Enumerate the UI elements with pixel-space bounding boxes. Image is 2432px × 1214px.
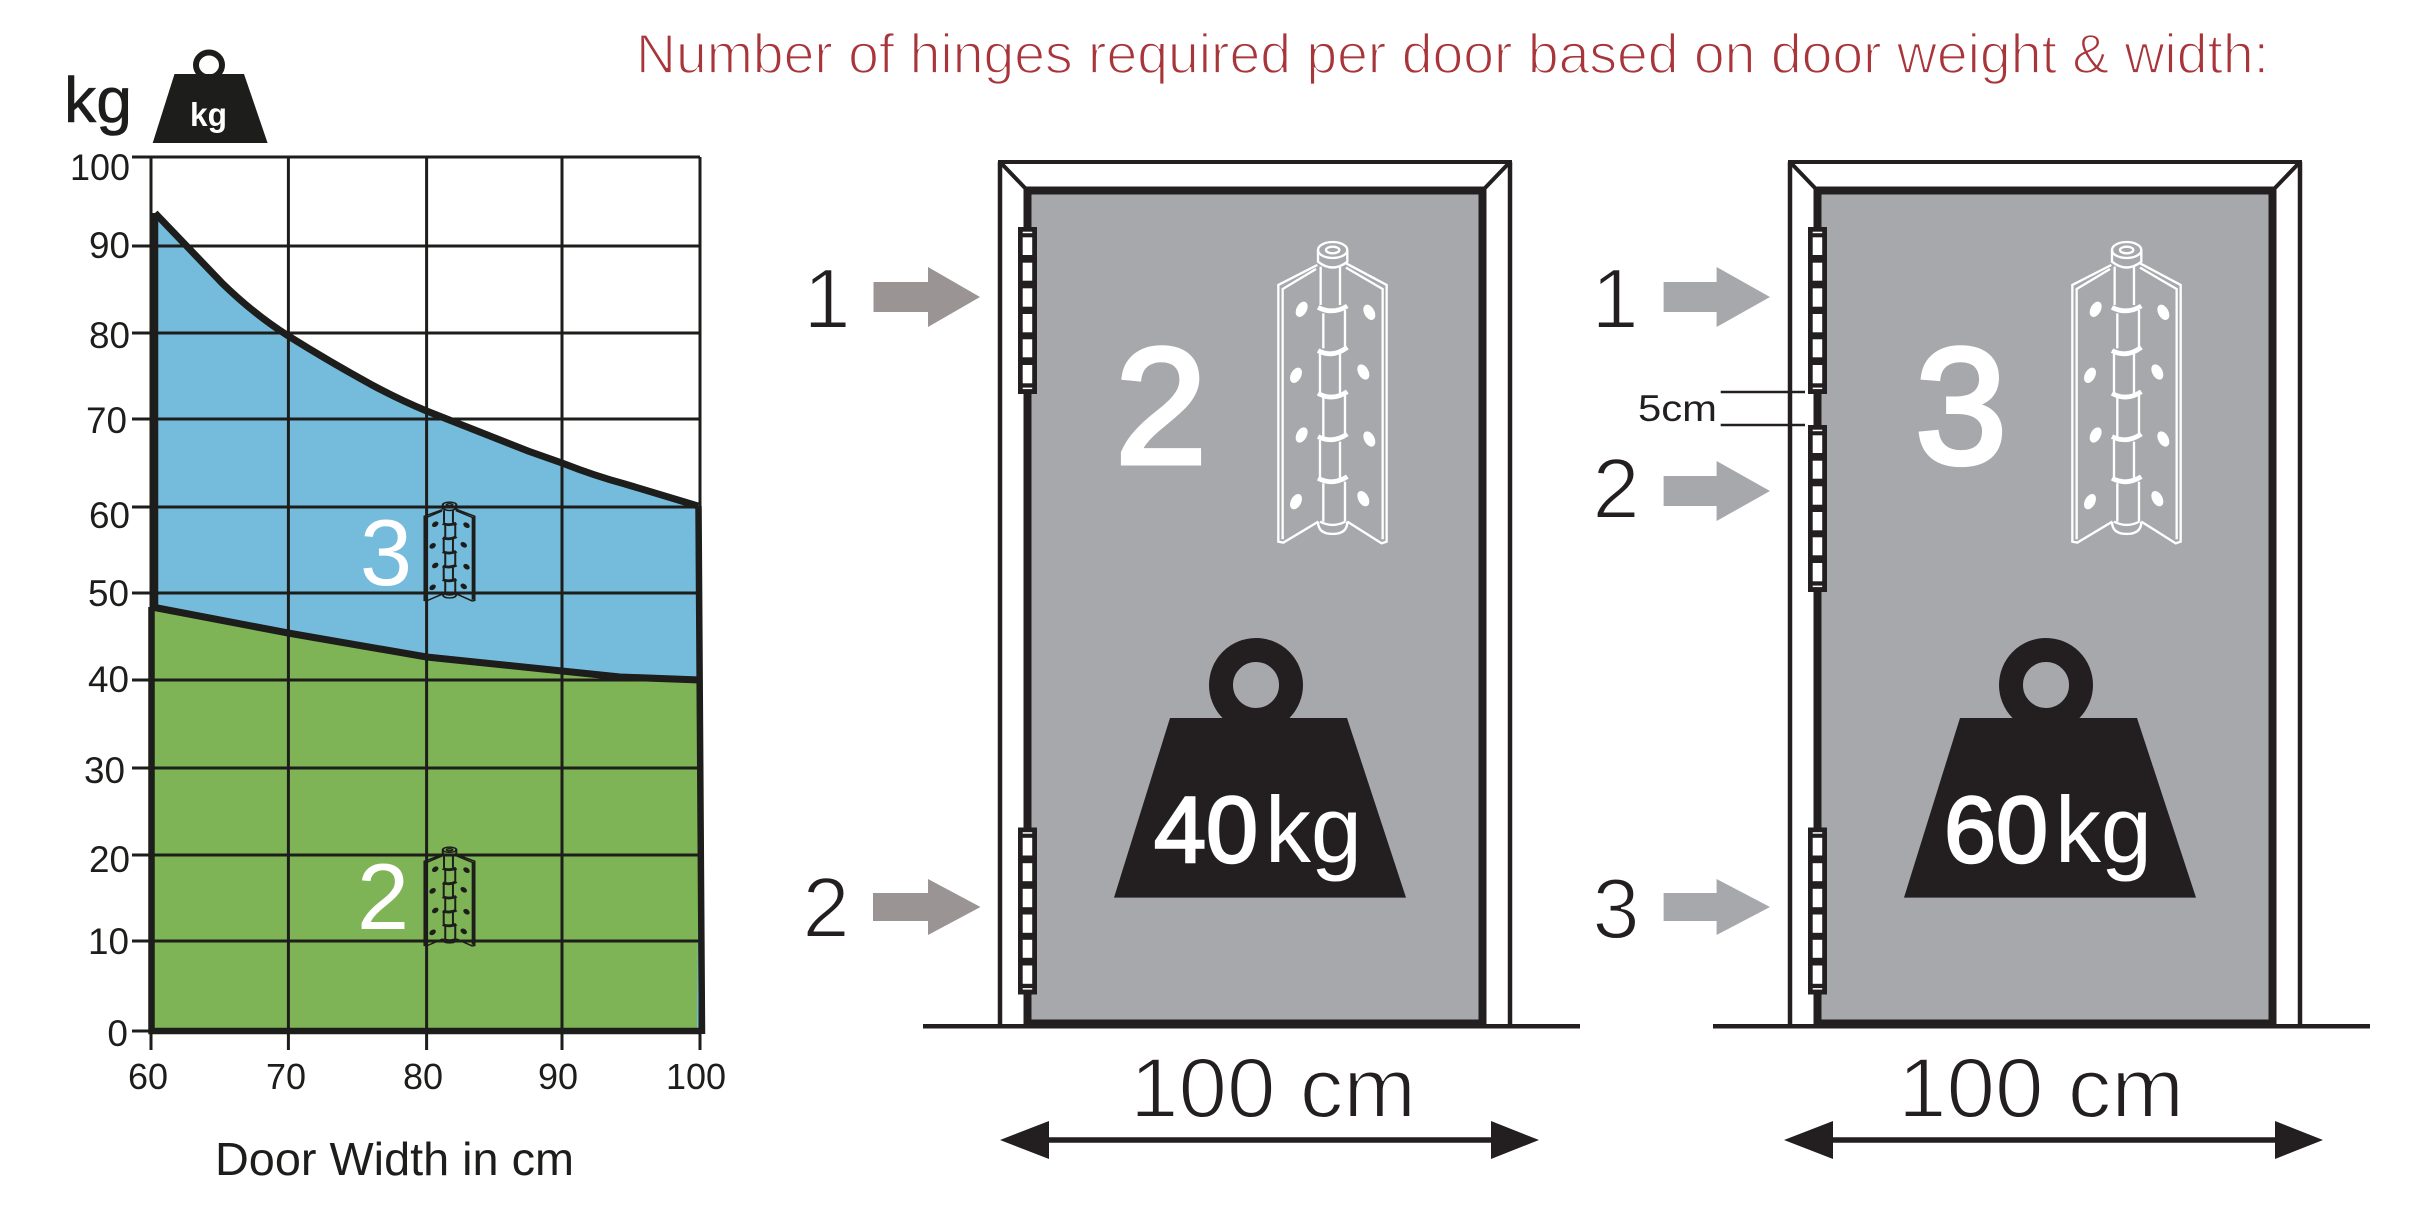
- hinge position 1 marker: [1591, 252, 1770, 347]
- x axis labels: 80: [403, 1056, 443, 1097]
- panel: 40kg door: [802, 162, 1580, 1159]
- icon: 60kg weight: 60: [1944, 777, 2048, 882]
- hinge position 2 marker: [802, 861, 980, 956]
- icon: hinge: [1278, 242, 1387, 543]
- icon: 60kg weight: [1904, 650, 2196, 898]
- y axis labels: 50: [88, 573, 129, 614]
- y axis labels: 20: [89, 839, 130, 880]
- y axis labels: 0: [107, 1013, 128, 1054]
- hinge position 3 marker: [1592, 862, 1770, 957]
- side hinges: [1808, 227, 1827, 994]
- y axis labels: 100: [70, 147, 130, 188]
- hinge position 2 marker: [1592, 442, 1770, 537]
- y axis unit label: kg: [64, 64, 132, 136]
- y axis labels: 80: [89, 315, 130, 356]
- side hinges: [1018, 227, 1037, 994]
- area: three hinges: [151, 214, 703, 1031]
- 5cm spacing callout: [1638, 388, 1805, 429]
- y axis labels: 10: [88, 921, 129, 962]
- x axis labels: 100: [666, 1056, 726, 1097]
- x axis labels: [128, 1056, 726, 1097]
- floor line: [1713, 1024, 2370, 1028]
- y axis labels: 60: [89, 495, 130, 536]
- hinge position 2 marker: 2: [802, 861, 850, 956]
- panel: 60kg door: [1591, 162, 2370, 1159]
- x axis title: Door Width in cm: [215, 1133, 574, 1185]
- icon: kg weight: kg: [190, 96, 227, 133]
- hinge position 1 marker: 1: [1591, 252, 1639, 347]
- x axis labels: 90: [538, 1056, 578, 1097]
- icon: kg weight: [153, 52, 268, 143]
- y axis labels: 70: [86, 400, 127, 441]
- x axis labels: 60: [128, 1056, 168, 1097]
- width label: 100 cm: [1898, 1041, 2184, 1135]
- icon: 40kg weight: [1114, 650, 1406, 898]
- icon: hinge: [2072, 242, 2181, 543]
- floor line: [923, 1024, 1580, 1028]
- y axis labels: 30: [84, 750, 125, 791]
- hinge position 3 marker: 3: [1592, 862, 1640, 957]
- label: two hinges zone: [357, 844, 475, 949]
- hinge count: 3: [1915, 314, 2007, 498]
- hinge position 1 marker: [803, 252, 980, 347]
- curve: lower limit: [152, 607, 700, 680]
- x axis labels: 70: [266, 1056, 306, 1097]
- icon: 40kg weight: kg: [1265, 777, 1362, 882]
- 5cm spacing callout: 5cm: [1638, 388, 1717, 429]
- door leaf: [1818, 190, 2272, 1024]
- width label: 100 cm: [1130, 1041, 1416, 1135]
- title: Number of hinges required per door based on door weight & width:: [636, 22, 2269, 85]
- hinge position 2 marker: 2: [1592, 442, 1640, 537]
- label: three hinges zone: [360, 500, 475, 605]
- area: two hinges: [151, 605, 700, 1031]
- door frame: [998, 162, 1512, 1026]
- width arrow: [1000, 1121, 1539, 1159]
- grid: [132, 157, 700, 1050]
- icon: 40kg weight: 40: [1154, 777, 1258, 882]
- label: two hinges zone: 2: [357, 844, 409, 949]
- width arrow: [1784, 1121, 2323, 1159]
- hinge position 1 marker: 1: [803, 252, 851, 347]
- y axis labels: 40: [88, 659, 129, 700]
- y axis labels: [70, 147, 130, 1054]
- curve: upper limit: [155, 213, 698, 506]
- chart border: [152, 213, 702, 1034]
- hinge count: 2: [1115, 314, 1207, 498]
- chart: door weight vs door width: [70, 147, 726, 1185]
- icon: 60kg weight: kg: [2055, 777, 2152, 882]
- door frame: [1788, 162, 2302, 1026]
- y axis labels: 90: [89, 225, 130, 266]
- door leaf: [1028, 190, 1482, 1024]
- label: three hinges zone: 3: [360, 500, 412, 605]
